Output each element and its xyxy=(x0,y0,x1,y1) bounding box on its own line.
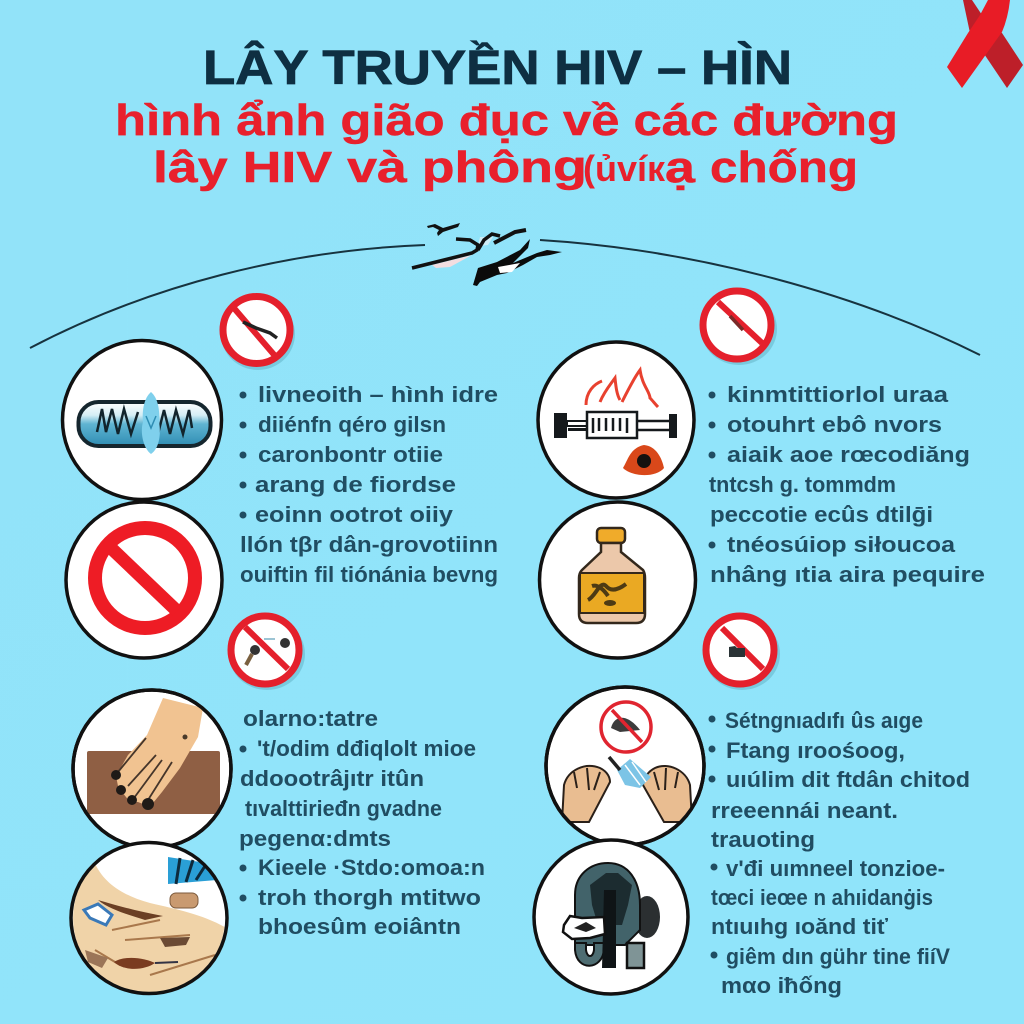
bullet list top right: aiaik aoe rœcodiăng xyxy=(727,442,970,467)
bullet list bottom left xyxy=(239,706,485,939)
bullet list bottom left: ddoootrâjıtr itûn xyxy=(240,766,424,791)
bullet list bottom right: giêm dın gühr tine fiíV xyxy=(726,944,950,969)
prohibition badge 1 xyxy=(221,296,295,370)
bullet list bottom left: Kieele ·Stdo:omoa:n xyxy=(258,855,485,880)
prohibition badge 2 xyxy=(701,291,777,365)
bullet list bottom right xyxy=(708,708,970,998)
bullet list bottom right: Ftang ıroośoog, xyxy=(726,738,905,763)
subtitle: ạ xyxy=(665,143,696,192)
circle icon: hands with tube and small prohibition sign xyxy=(546,687,704,845)
bullet list top left: ouiftin fil tiónánia bevng xyxy=(240,562,498,587)
bullet list top right: kinmtittiorlol uraa xyxy=(727,382,949,407)
bullet list bottom right: ntıuıhg ıoănd tiť xyxy=(711,914,888,939)
circle icon: bottle xyxy=(540,502,696,658)
subtitle: ɡ xyxy=(553,142,587,191)
bullet list bottom left: 't/odim dđiqlolt mioe xyxy=(257,736,476,761)
arc line right xyxy=(540,240,980,355)
bullet list top left: eoinn ootrot oiiy xyxy=(255,502,454,527)
bullet list bottom left: bhoesûm eoiântn xyxy=(258,914,461,939)
icon: red awareness ribbon xyxy=(947,0,1023,88)
circle icon: hand on surface xyxy=(73,690,231,848)
circle icon: syringe and flames xyxy=(538,342,694,498)
bullet list bottom left: tıvalttirieđn gvadne xyxy=(245,796,442,821)
bullet list bottom right: rreeennái neant. xyxy=(711,798,898,823)
bullet list bottom right: trauoting xyxy=(711,827,815,852)
subtitle: lây HIV và phôn xyxy=(153,143,553,192)
bullet list top right: tnéosúiop siłoucoa xyxy=(727,532,956,557)
bullet list top right: otouhrt ebô nvors xyxy=(727,412,942,437)
bullet list bottom right: uıúlim dit ftdân chitod xyxy=(726,767,970,792)
bullet list bottom left: olarno:tatre xyxy=(243,706,378,731)
subtitle: chống xyxy=(710,143,858,192)
prohibition badge 4 xyxy=(704,616,780,690)
panel: top left xyxy=(62,296,498,658)
icon: flying birds xyxy=(412,223,562,286)
bullet list top left: arang de fiordse xyxy=(255,472,456,497)
bullet list bottom right: Sétngnıadıfı ûs aıge xyxy=(725,708,923,733)
bullet list bottom left: troh thorgh mtitwo xyxy=(258,885,481,910)
bullet list top right xyxy=(708,382,985,587)
bullet list top right: peccotie ecûs dtilḡi xyxy=(710,502,933,527)
panel: bottom right xyxy=(534,616,970,998)
panel: bottom left xyxy=(60,616,485,1000)
subtitle xyxy=(115,96,898,192)
title: LÂY TRUYỀN HIV – HÌN xyxy=(203,40,792,95)
prohibition badge 3 xyxy=(229,616,305,690)
bullet list top left: livneoith – hình idre xyxy=(258,382,498,407)
bullet list top left: caronbontr otiie xyxy=(258,442,443,467)
bullet list top left: diiénfn qéro gilsn xyxy=(258,412,446,437)
bullet list bottom right: tœci ieœe n ahıidanġis xyxy=(711,885,933,910)
panel: top right xyxy=(538,291,985,658)
arc line left xyxy=(30,245,425,348)
bullet list top left xyxy=(240,382,498,587)
circle icon: hands and tools collage xyxy=(60,842,230,1000)
circle icon: prohibition sign xyxy=(66,502,222,658)
bullet list bottom right: mαo iħống xyxy=(721,973,842,998)
subtitle: (ủvíк xyxy=(583,148,666,189)
circle icon: virus pill xyxy=(62,340,222,500)
bullet list bottom left: pegenα:dmts xyxy=(239,826,391,851)
bullet list top left: llón tβr dân-grovotiinn xyxy=(240,532,498,557)
circle icon: dark organ illustration xyxy=(534,840,688,994)
bullet list top right: nhâng ıtia aira pequire xyxy=(710,562,985,587)
bullet list bottom right: v'đi uımneel tonzioe- xyxy=(726,856,945,881)
bullet list top right: tntcsh g. tommdm xyxy=(709,472,896,497)
subtitle: hình ẩnh giãо đụс về các đường xyxy=(115,96,898,145)
